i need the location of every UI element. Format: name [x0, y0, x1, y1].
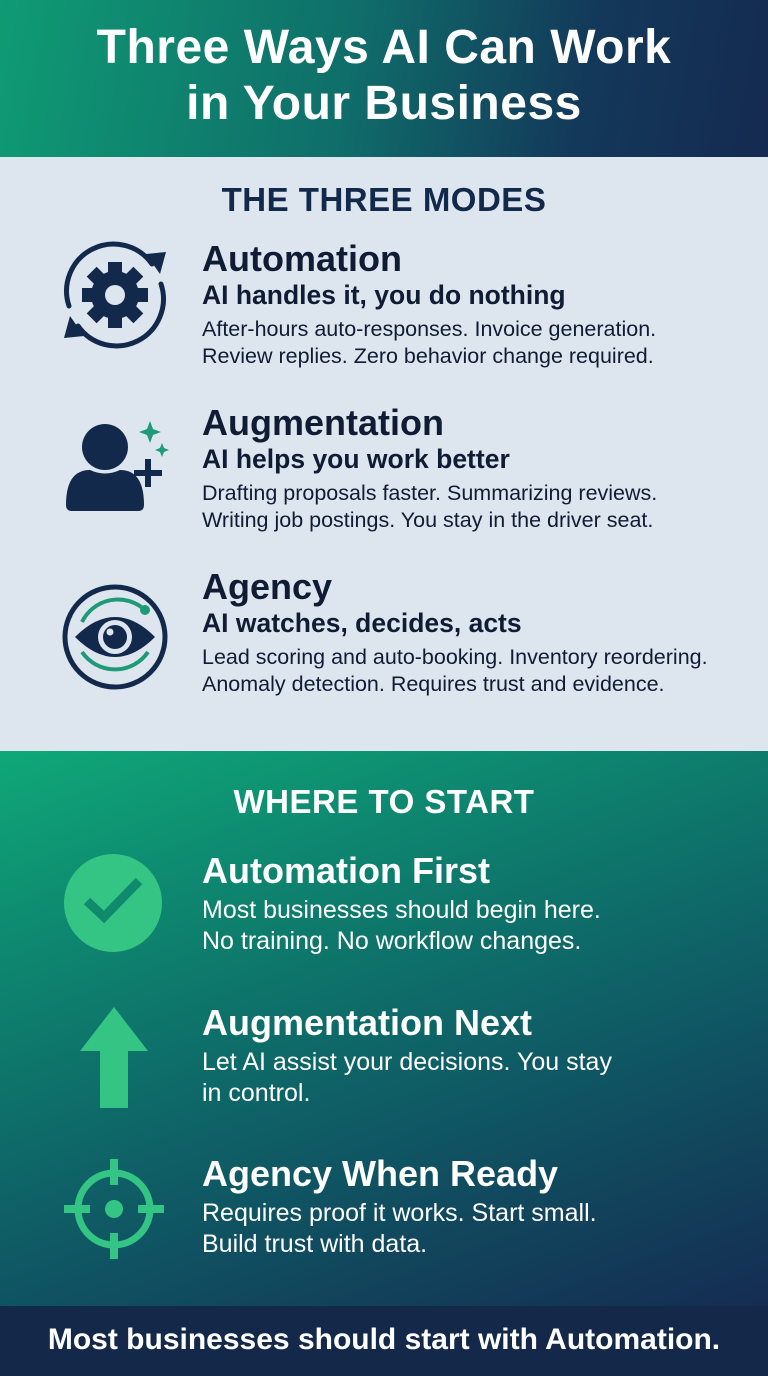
item: augmentation: Drafting proposals faster. Summarizing reviews. [202, 481, 657, 505]
icon: target [64, 1159, 164, 1259]
icon: check circle [64, 854, 162, 952]
item: automation first: Automation First [202, 850, 490, 891]
title: in Your Business [186, 77, 582, 130]
item: agency: Anomaly detection. Requires trust and evidence. [202, 672, 665, 696]
item: automation: Review replies. Zero behavior change required. [202, 344, 654, 368]
item: augmentation: AI helps you work better [202, 444, 510, 474]
title: Three Ways AI Can Work [97, 21, 671, 74]
panel: three modes [0, 157, 768, 751]
item: automation first: No training. No workflow changes. [202, 927, 581, 955]
item: agency when ready: Build trust with data. [202, 1230, 427, 1258]
item: automation: After-hours auto-responses. Invoice generation. [202, 317, 656, 341]
item: automation: Automation [202, 238, 402, 279]
item: automation [202, 238, 656, 368]
item: agency: AI watches, decides, acts [202, 608, 522, 638]
item: augmentation next [202, 1002, 612, 1107]
item: agency when ready [202, 1153, 597, 1258]
icon: eye [62, 584, 168, 690]
item: augmentation: Augmentation [202, 402, 444, 443]
icon: up arrow [80, 1007, 148, 1108]
icon: gear cycle [64, 242, 166, 348]
item: agency: Agency [202, 566, 332, 607]
panel: where to start [0, 751, 768, 1306]
item: augmentation next: Let AI assist your decisions. You stay [202, 1048, 612, 1076]
item: augmentation: Writing job postings. You stay in the driver seat. [202, 508, 653, 532]
title [97, 21, 671, 130]
header [0, 0, 768, 157]
item: augmentation [202, 402, 657, 532]
item: automation: AI handles it, you do nothing [202, 280, 566, 310]
item: agency: Lead scoring and auto-booking. Inventory reordering. [202, 645, 708, 669]
footer banner [0, 1306, 768, 1376]
item: automation first: Most businesses should begin here. [202, 896, 601, 924]
heading: the three modes: THE THREE MODES [222, 181, 546, 218]
item: automation first [202, 850, 601, 955]
item: augmentation next: Augmentation Next [202, 1002, 532, 1043]
item: agency when ready: Agency When Ready [202, 1153, 558, 1194]
item: agency [202, 566, 708, 696]
heading: where to start: WHERE TO START [234, 783, 534, 820]
item: agency when ready: Requires proof it works. Start small. [202, 1199, 597, 1227]
icon: person plus [66, 421, 169, 511]
item: augmentation next: in control. [202, 1079, 310, 1107]
footer banner: Most businesses should start with Automation. [48, 1323, 720, 1356]
